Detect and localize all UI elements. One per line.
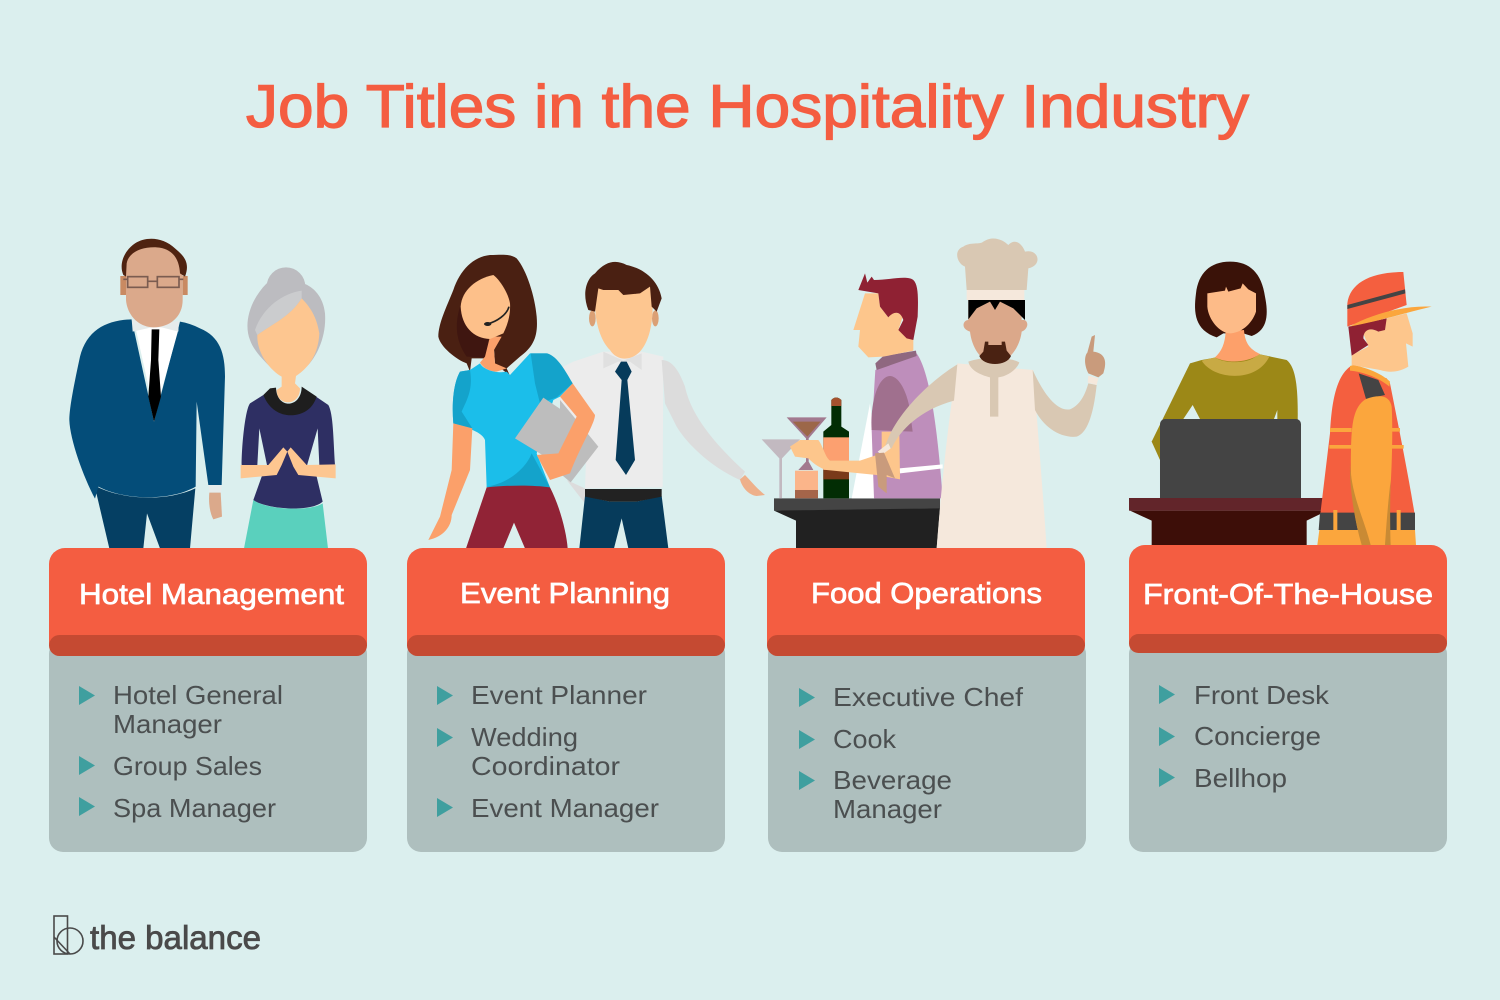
panel body xyxy=(1129,640,1447,852)
serving counter xyxy=(774,498,940,548)
panel: food operations xyxy=(767,548,1086,852)
panel body xyxy=(49,640,367,852)
illustration: event planning staff xyxy=(428,255,765,548)
figure: older woman with grey hair xyxy=(241,267,336,548)
panel heading band xyxy=(407,548,725,656)
job list: Event Manager xyxy=(471,793,659,823)
panel: hotel management xyxy=(49,548,367,852)
illustration: front-of-the-house staff xyxy=(1129,262,1432,545)
panel heading band: Hotel Management xyxy=(79,579,344,611)
title: Job Titles in the Hospitality Industry xyxy=(246,73,1249,140)
job list: Cook xyxy=(833,724,897,754)
job list xyxy=(79,680,283,823)
job list: Beverage xyxy=(833,765,952,795)
logo: the balance xyxy=(54,916,261,956)
figure: hotel manager xyxy=(69,239,225,548)
job list: Manager xyxy=(113,709,222,739)
figure: front desk clerk with laptop xyxy=(1152,262,1301,506)
figure: bartender xyxy=(790,273,943,498)
panel body xyxy=(407,640,725,852)
panel heading band: Event Planning xyxy=(460,578,670,610)
panel heading band: Food Operations xyxy=(811,578,1042,610)
figure: bellhop xyxy=(1317,272,1432,545)
panel: front-of-the-house xyxy=(1129,545,1447,852)
job list: Group Sales xyxy=(113,751,262,781)
job list: Bellhop xyxy=(1194,763,1287,793)
job list: Front Desk xyxy=(1194,680,1330,710)
reception desk xyxy=(1129,498,1329,545)
panel heading band xyxy=(767,548,1085,656)
figure: woman with headset and folder xyxy=(428,255,598,548)
job list: Manager xyxy=(833,794,942,824)
job list xyxy=(1159,680,1330,793)
logo mark xyxy=(54,916,83,954)
job list: Event Planner xyxy=(471,680,647,710)
job list xyxy=(799,682,1024,824)
illustration: hotel management staff xyxy=(69,239,336,548)
illustration: food operations staff xyxy=(762,238,1105,548)
figure: chef xyxy=(875,238,1105,548)
job list: Spa Manager xyxy=(113,793,276,823)
job list: Coordinator xyxy=(471,751,620,781)
figure: man in white shirt and tie xyxy=(560,262,765,548)
job list: Wedding xyxy=(471,722,578,752)
panel body xyxy=(768,640,1086,852)
panel: event planning xyxy=(407,548,725,852)
logo wordmark: the balance xyxy=(90,919,261,956)
job list: Executive Chef xyxy=(833,682,1024,712)
job list: Concierge xyxy=(1194,721,1321,751)
panel heading band: Front-Of-The-House xyxy=(1143,579,1433,611)
cocktail glasses and bottle xyxy=(762,397,849,498)
panel heading band xyxy=(49,548,367,656)
job list: Hotel General xyxy=(113,680,283,710)
panel heading band xyxy=(1129,545,1447,653)
job list xyxy=(437,680,659,823)
